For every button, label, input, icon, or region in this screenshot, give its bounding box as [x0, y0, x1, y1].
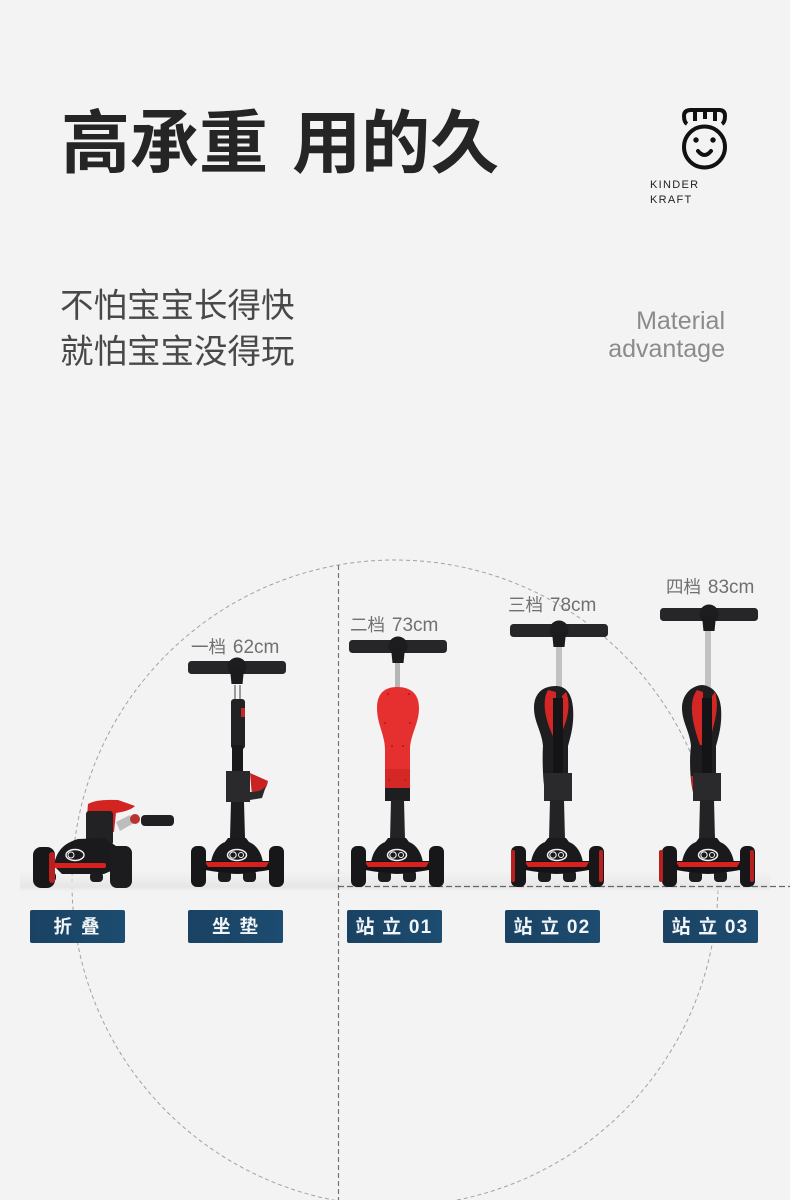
label: standing 03: [663, 910, 758, 943]
label: folded: 折叠: [53, 916, 109, 937]
label: folded: [30, 910, 125, 943]
scooter: standing 02, 78cm: [508, 595, 608, 887]
scooter: standing 01, 73cm: [349, 615, 447, 887]
material advantage caption: Material: [636, 307, 725, 335]
folded deck: [534, 686, 573, 800]
label: standing 01: 站 立 01: [356, 915, 432, 938]
icon: smiling face with chef hat: [684, 110, 725, 168]
label: seat: [188, 910, 283, 943]
horizontal dashed ground line: [338, 886, 790, 888]
height label: 四档 83cm: [666, 577, 754, 598]
label: standing 02: [505, 910, 600, 943]
red deck: [377, 687, 419, 790]
title: 高承重 用的久: [61, 105, 499, 182]
height label: 三档 78cm: [508, 595, 596, 616]
logo: Kinder Kraft: [650, 110, 725, 206]
vertical dashed guide line: [338, 565, 340, 1200]
ground shadow: [20, 870, 770, 894]
dashed guide circle: [72, 560, 718, 1200]
label: seat: 坐垫: [212, 916, 267, 937]
scooter: folded: [33, 800, 174, 888]
subtitle: 不怕宝宝长得快: [60, 288, 294, 325]
logo wordmark: KINDER: [650, 179, 699, 191]
label: standing 03: 站 立 03: [672, 915, 748, 938]
scooter: standing 03, 83cm: [659, 577, 758, 887]
material advantage caption: advantage: [608, 335, 725, 363]
height label: 二档 73cm: [350, 615, 438, 636]
label: standing 01: [347, 910, 442, 943]
logo wordmark: KRAFT: [650, 194, 693, 206]
scooter: seat mode, 62cm: [188, 637, 286, 887]
subtitle: 就怕宝宝没得玩: [60, 334, 294, 371]
label: standing 02: 站 立 02: [514, 915, 590, 938]
folded deck: [682, 685, 721, 800]
height label: 一档 62cm: [191, 637, 279, 658]
